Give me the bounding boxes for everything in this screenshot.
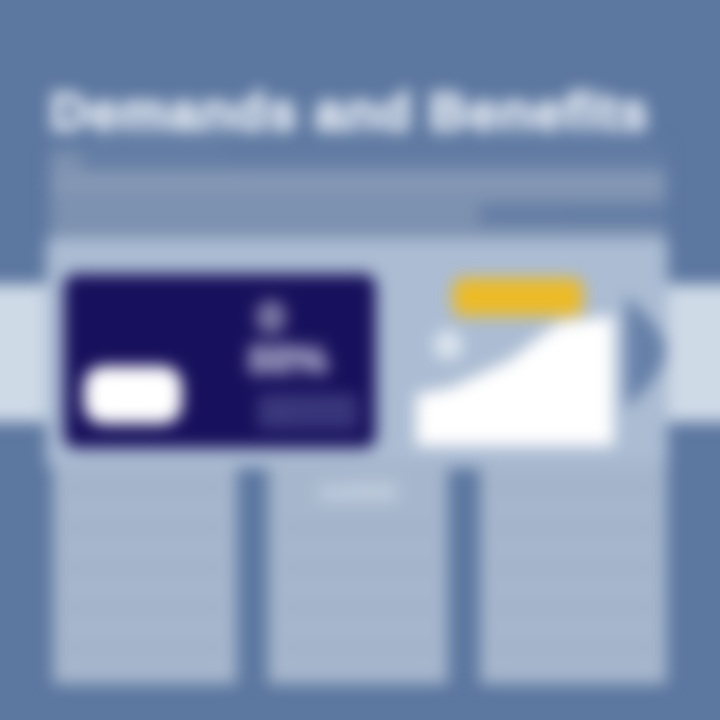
chart marker [433, 330, 463, 360]
column two: Detail [282, 563, 302, 572]
intro text block [50, 150, 666, 240]
dark stat card [64, 274, 376, 448]
column one: Detail [67, 643, 87, 652]
column three: Detail [494, 563, 514, 572]
column two: Detail [282, 643, 302, 652]
title: Demands and Benefits [50, 83, 649, 142]
stat caption [258, 394, 358, 430]
column two: Benefit [282, 523, 307, 532]
column one: Benefit [67, 523, 92, 532]
column two: Detail [282, 603, 302, 612]
column one [53, 462, 237, 684]
column three: Benefit [494, 523, 519, 532]
white pill button [84, 366, 182, 424]
background band [0, 284, 720, 422]
icon: small marker [256, 300, 286, 334]
stat number: 88% [248, 338, 328, 382]
column one: Detail [67, 563, 87, 572]
stat caption: of demands met with benefits [258, 396, 350, 422]
intro text block: Key demands and the benefits they provide [50, 177, 242, 188]
area chart [406, 308, 624, 456]
column three: Demand [494, 483, 524, 492]
text: Demands and benefits overview [82, 144, 224, 155]
intro text block: Summary of points [480, 209, 563, 220]
column two: Demand [318, 481, 348, 490]
column three [480, 462, 667, 684]
column three: Detail [494, 603, 514, 612]
yellow label [453, 278, 583, 316]
arrow: next chevron [617, 295, 674, 409]
central panel [46, 238, 668, 468]
column two [268, 462, 448, 684]
column one: Demand [67, 483, 97, 492]
column one: Detail [67, 603, 87, 612]
column three: Detail [494, 643, 514, 652]
